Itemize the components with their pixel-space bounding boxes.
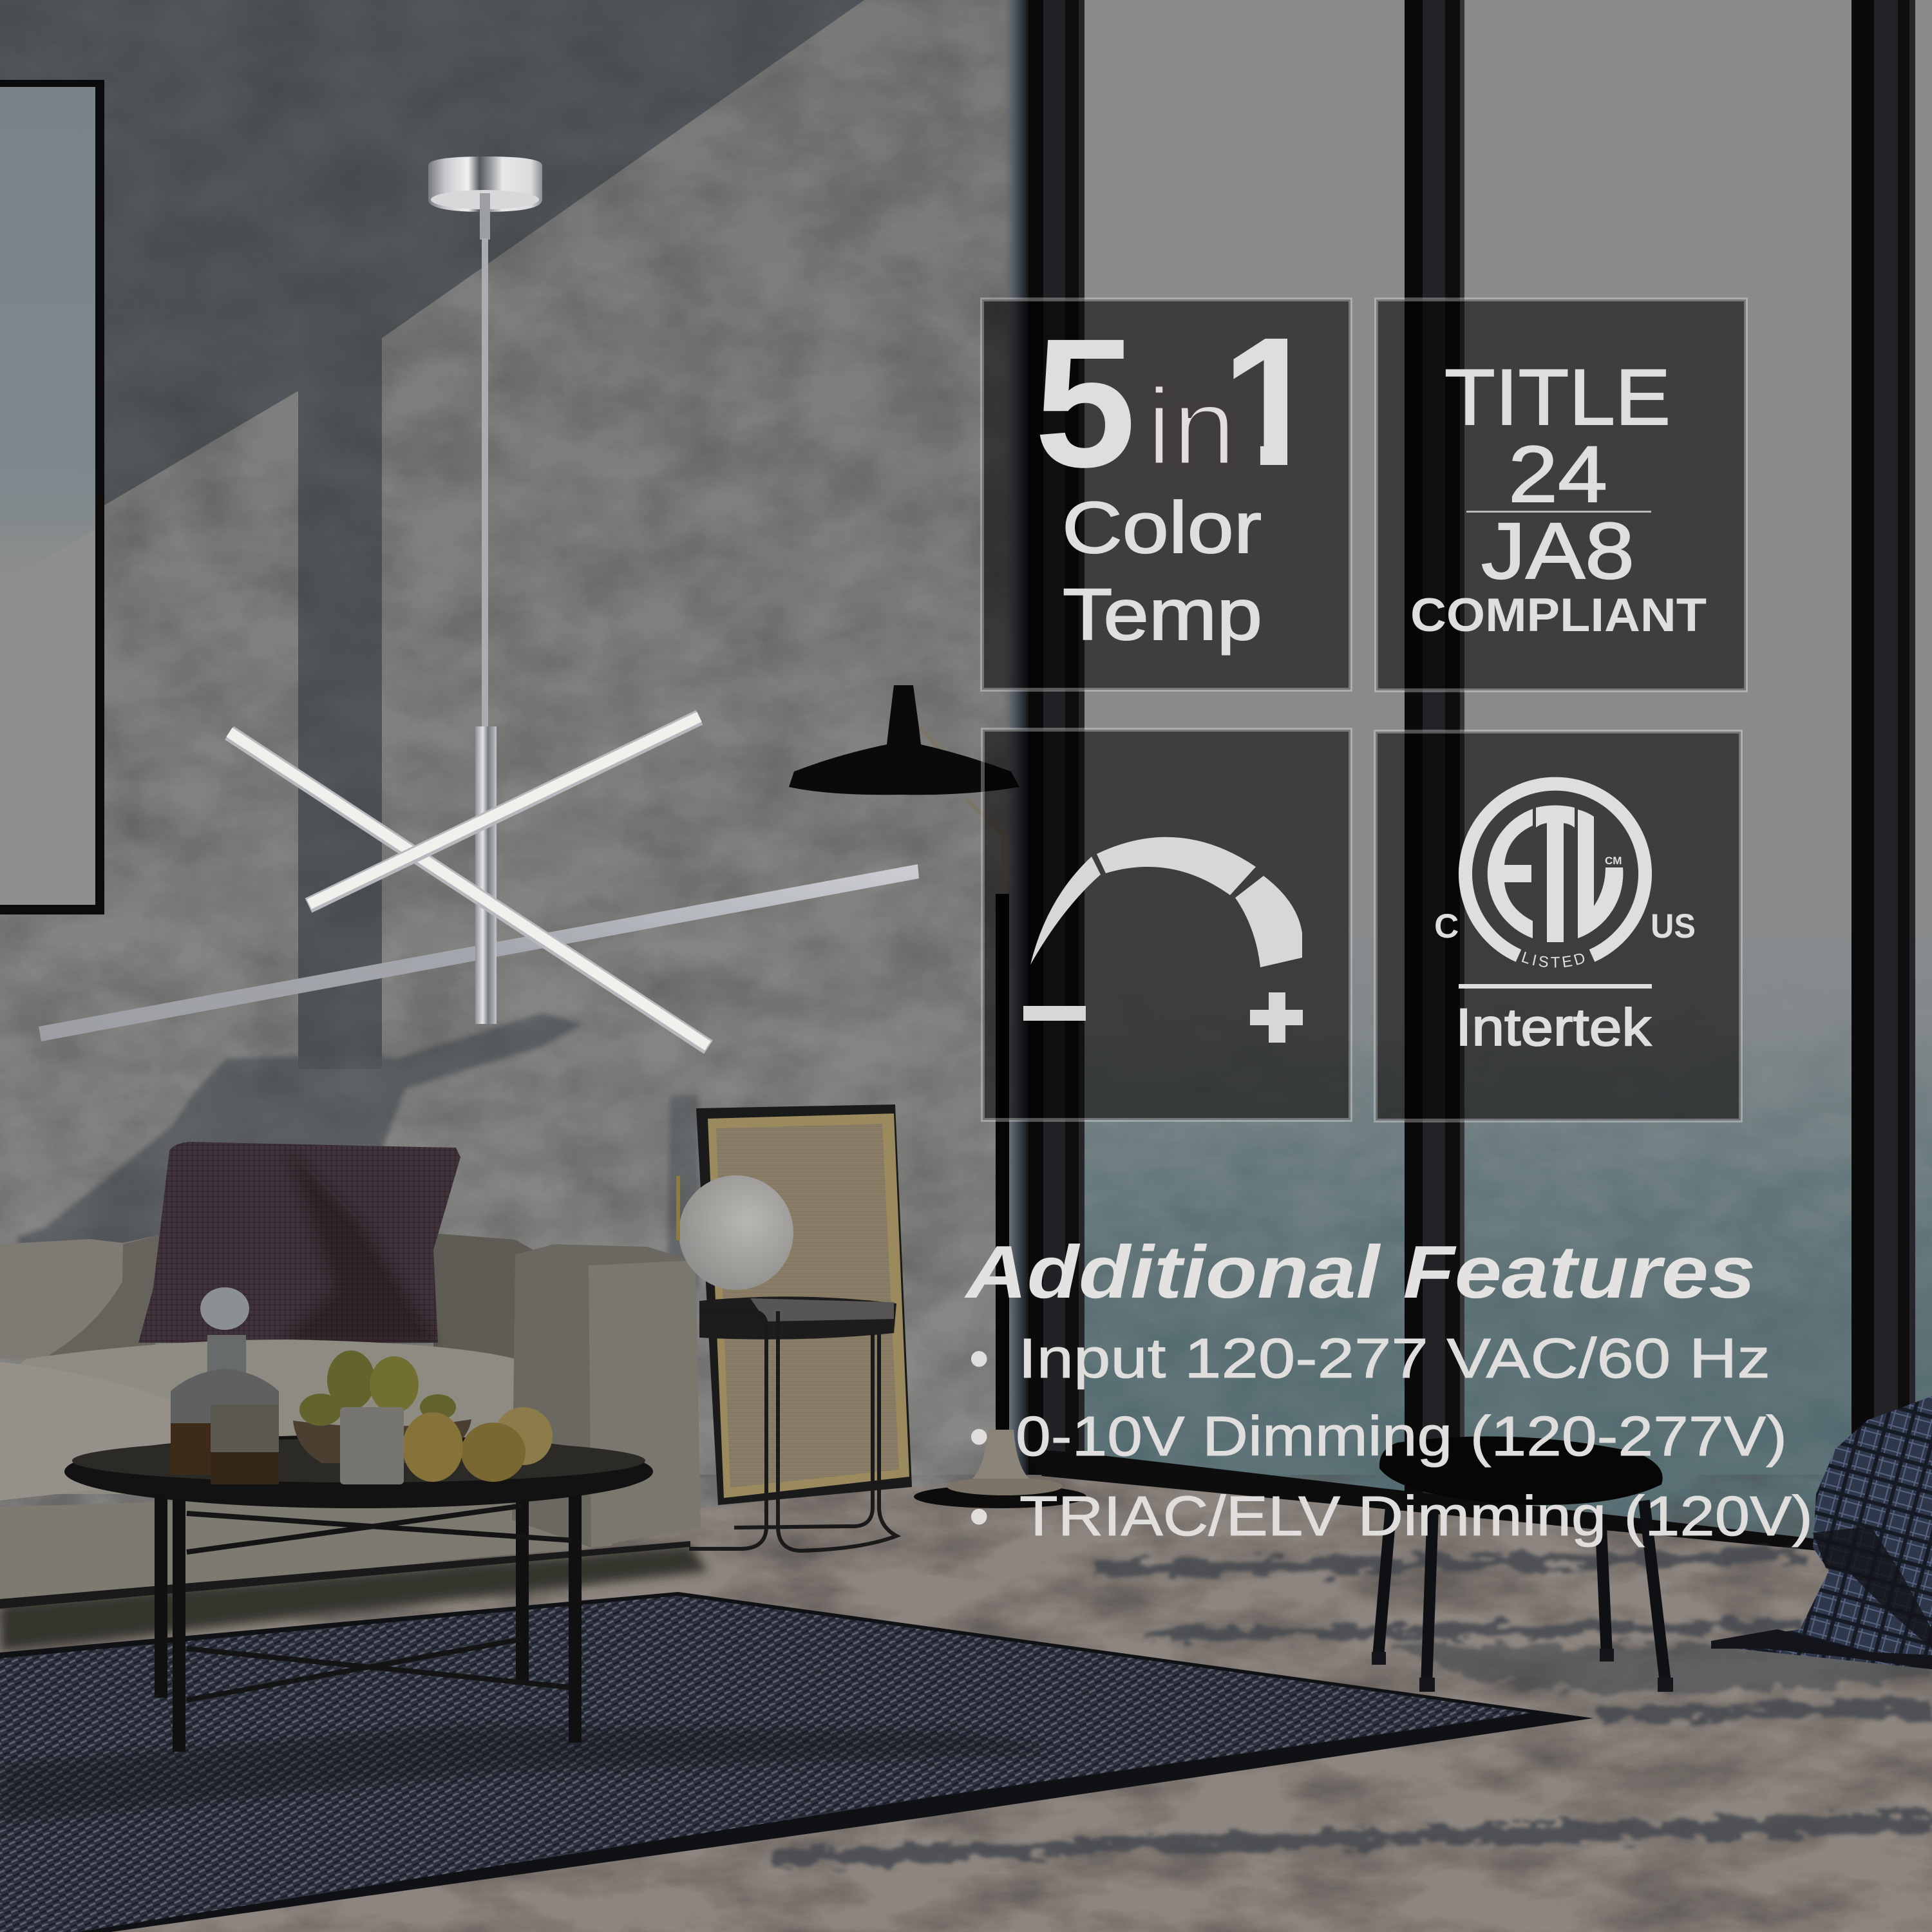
icon: plus bbox=[1250, 992, 1303, 1043]
lamp pole bbox=[996, 894, 1009, 1432]
sofa seat cushion bbox=[0, 1340, 576, 1494]
white arm ascending bbox=[308, 717, 699, 905]
label US: US bbox=[1651, 907, 1696, 945]
rule bbox=[1459, 984, 1652, 989]
canopy bbox=[428, 156, 542, 240]
coffee table bbox=[64, 1287, 653, 1752]
lamp stem bbox=[676, 1176, 680, 1240]
window bottom frame bbox=[1028, 1449, 1932, 1561]
listed text: LISTED bbox=[1521, 952, 1584, 967]
lamp base cone bbox=[972, 1430, 1029, 1479]
crystal glass bbox=[340, 1407, 404, 1484]
sofa left cushion bbox=[0, 1362, 171, 1501]
feature: input: • bbox=[969, 1327, 989, 1390]
letter L bbox=[1578, 810, 1623, 938]
icon: minus bbox=[1023, 1006, 1086, 1021]
books bbox=[750, 1298, 894, 1321]
rug bbox=[0, 1592, 1593, 1932]
sofa back cushions bbox=[0, 1235, 161, 1359]
rule bbox=[1466, 511, 1651, 513]
label C: C bbox=[1434, 907, 1459, 945]
panel: dimming bbox=[983, 730, 1350, 1120]
sofa arm bbox=[512, 1244, 701, 1548]
glass window panes bbox=[1030, 0, 1932, 1558]
table legs bbox=[161, 1494, 575, 1752]
compliant text: COMPLIANT bbox=[1410, 589, 1707, 641]
number 24: 24 bbox=[1508, 430, 1607, 519]
JA8 text: JA8 bbox=[1481, 507, 1634, 596]
floor shadow bands bbox=[773, 1549, 1932, 1868]
label color: Color bbox=[1062, 487, 1262, 568]
numeral 5: 5 bbox=[1034, 301, 1136, 506]
concrete wall bbox=[0, 0, 1030, 1610]
table top bbox=[64, 1435, 653, 1508]
word in: in bbox=[1146, 366, 1236, 488]
chandelier bbox=[39, 156, 919, 1047]
ETL outer ring bbox=[1466, 784, 1645, 956]
window mullion left bbox=[1028, 0, 1084, 1475]
pomegranates bbox=[402, 1407, 553, 1482]
letter T bbox=[1536, 805, 1575, 942]
blanket bottom fringe bbox=[1711, 1629, 1932, 1669]
table legs bbox=[689, 1311, 896, 1551]
panel: ETL listed bbox=[1374, 730, 1743, 1122]
suspension rod bbox=[482, 238, 488, 728]
window mullion right bbox=[1852, 0, 1915, 1552]
sofa rear right back bbox=[433, 1233, 567, 1507]
globe lamp bbox=[679, 1175, 793, 1290]
long gray arm bbox=[39, 864, 919, 1041]
feature: input: Input 120-277 VAC/60 Hz bbox=[1018, 1327, 1770, 1390]
stool bbox=[1372, 1436, 1673, 1692]
throw pillow bbox=[138, 1142, 460, 1343]
panel: title 24 bbox=[1376, 299, 1746, 690]
sofa frame rail bbox=[0, 1541, 690, 1609]
white arm descending bbox=[229, 732, 708, 1047]
sofa back shadow bbox=[48, 1235, 161, 1356]
title text: TITLE bbox=[1444, 354, 1671, 442]
icon: ETL mark bbox=[1458, 777, 1653, 967]
center stem bbox=[475, 726, 497, 1024]
feature: TRIAC: • bbox=[969, 1485, 989, 1548]
side table with globe lamp bbox=[676, 1175, 896, 1551]
decanter bbox=[171, 1287, 279, 1484]
lamp shade bbox=[789, 685, 1019, 795]
pears bbox=[299, 1350, 456, 1426]
heading: Additional Features bbox=[964, 1230, 1756, 1314]
table top bbox=[699, 1296, 896, 1340]
intertek text: Intertek bbox=[1455, 998, 1652, 1057]
lamp arm bbox=[920, 728, 1003, 895]
CM mark: CM bbox=[1605, 855, 1622, 867]
stool feet bbox=[1372, 1649, 1673, 1692]
sofa bbox=[0, 1142, 701, 1609]
feature: 0-10V: • bbox=[969, 1405, 989, 1468]
additional features text block bbox=[964, 1230, 1813, 1548]
blanket side fringe bbox=[1813, 1526, 1932, 1649]
label temp: Temp bbox=[1063, 574, 1262, 655]
pillow shading bbox=[283, 1153, 438, 1343]
floor bbox=[0, 1475, 1932, 1932]
canvas leaning on wall bbox=[696, 1104, 912, 1505]
sofa arm front bbox=[589, 1260, 701, 1548]
floor lamp bbox=[789, 685, 1086, 1508]
panel: 5 in 1 color temp bbox=[982, 299, 1350, 690]
feature: TRIAC: TRIAC/ELV Dimming (120V) bbox=[1019, 1485, 1813, 1548]
fruit bowl bbox=[293, 1419, 471, 1463]
window mullion center bbox=[1405, 0, 1464, 1501]
feature: 0-10V: 0-10V Dimming (120-277V) bbox=[1016, 1405, 1787, 1468]
numeral 1: 1 bbox=[1221, 299, 1323, 504]
lamp base disc bbox=[914, 1485, 1086, 1508]
sofa base bbox=[0, 1488, 612, 1600]
stool legs bbox=[1378, 1501, 1665, 1685]
letter E bbox=[1488, 809, 1533, 938]
framed picture on wall bbox=[0, 80, 104, 914]
icon: dimmer arc bbox=[1030, 837, 1302, 967]
table cross bars bbox=[187, 1506, 573, 1700]
stool seat bbox=[1379, 1436, 1663, 1505]
plaid blanket bbox=[1711, 1396, 1932, 1669]
